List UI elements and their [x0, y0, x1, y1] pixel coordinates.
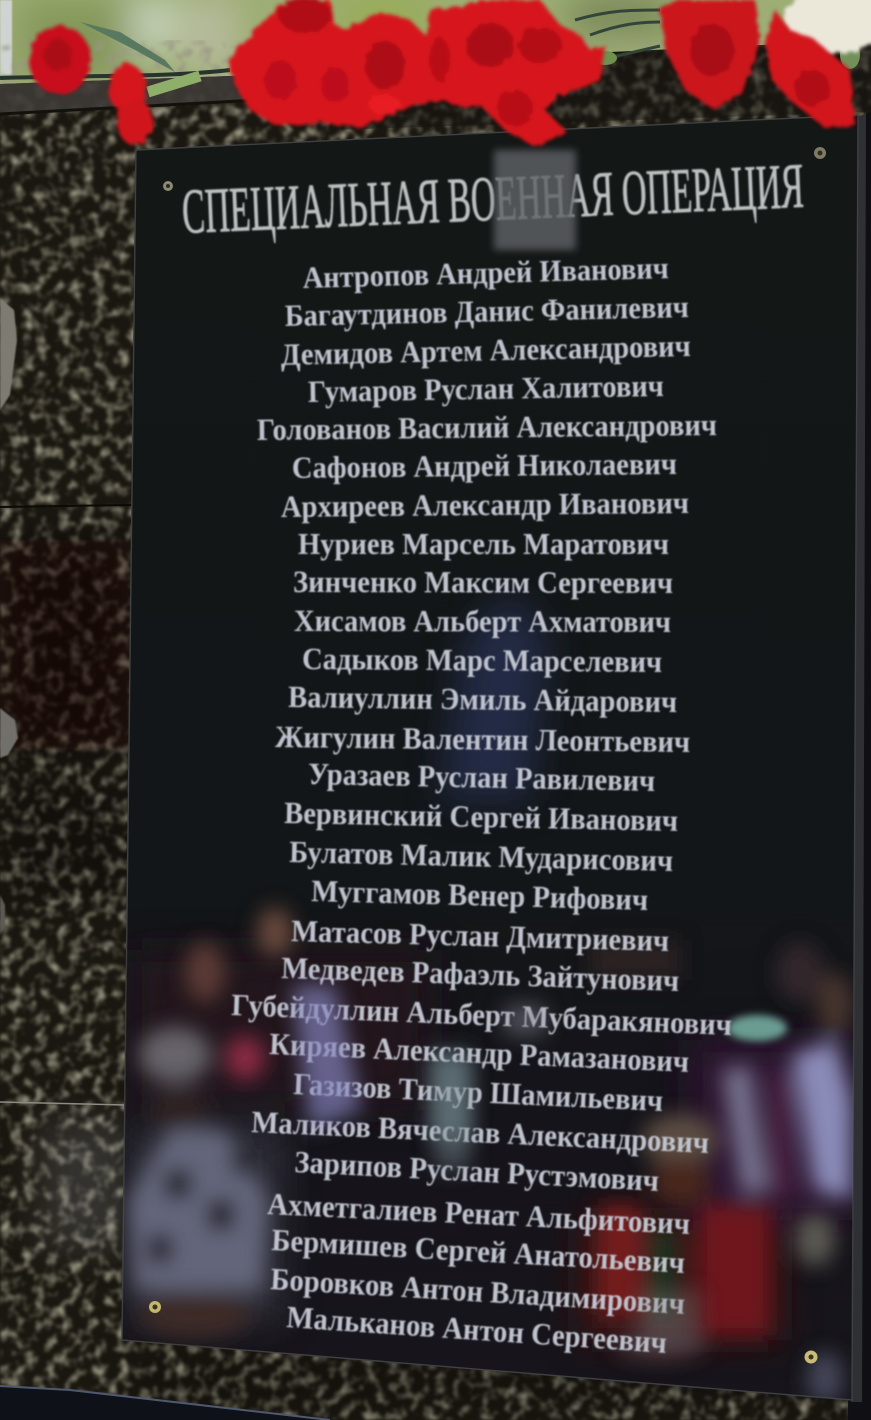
names list: Мальканов Антон Сергеевич: [286, 1299, 668, 1360]
names list: Медведев Рафаэль Зайтунович: [281, 950, 680, 998]
stone fragments at left edge: [0, 298, 18, 935]
names list: Демидов Артем Александрович: [280, 328, 691, 372]
bottom railing: [0, 1386, 330, 1420]
names list: Архиреев Александр Иванович: [281, 485, 689, 524]
background: foliage behind the memorial: [0, 0, 800, 84]
red carnations: [29, 0, 855, 147]
names list: Губейдуллин Альберт Мубаракянович: [231, 987, 733, 1042]
reflections in the polished stone: [128, 590, 853, 1404]
names list: [231, 250, 733, 1360]
names list: Гумаров Руслан Халитович: [308, 368, 664, 409]
names list: Голованов Василий Александрович: [257, 407, 717, 447]
names list: Сафонов Андрей Николаевич: [292, 446, 677, 485]
stems and leaves: [0, 10, 860, 103]
carnation hanging left: [108, 64, 153, 145]
carnation far left: [29, 26, 91, 94]
names list: Киряев Александр Рамазанович: [269, 1026, 690, 1079]
names list: Уразаев Руслан Равилевич: [308, 756, 655, 798]
names list: Муггамов Венер Рифович: [311, 873, 649, 917]
names list: Ахметгалиев Ренат Альфитович: [267, 1186, 691, 1241]
names list: Садыков Марс Марселевич: [302, 641, 662, 679]
lighter stone ledge: [0, 70, 330, 114]
screws: [149, 147, 826, 1364]
people on right: [776, 942, 824, 1002]
names list: Матасов Руслан Дмитриевич: [291, 913, 670, 958]
names list: Боровков Антон Владимирович: [270, 1261, 686, 1321]
carnation bouquet centre: [228, 0, 605, 147]
names list: Хисамов Альберт Ахматович: [294, 603, 671, 639]
names list: Зинченко Максим Сергеевич: [293, 564, 673, 600]
names list: Нуриев Марсель Маратович: [298, 526, 669, 561]
carnation far right: [765, 10, 855, 128]
names list: Валиуллин Эмиль Айдарович: [288, 679, 677, 719]
names list: Жигулин Валентин Леонтьевич: [275, 719, 690, 759]
white flower: [784, 0, 871, 54]
names list: Газизов Тимур Шамильевич: [293, 1066, 664, 1118]
faces on left: [185, 942, 225, 1002]
names list: Антропов Андрей Иванович: [302, 250, 669, 295]
dark right mount: [848, 112, 871, 1420]
checked shirt: [128, 1130, 268, 1290]
reflected light over the lettering: [292, 150, 700, 1340]
names list: Булатов Малик Мударисович: [289, 834, 674, 878]
names list: Бермишев Сергей Анатольевич: [271, 1222, 686, 1280]
names list: Вервинский Сергей Иванович: [284, 795, 678, 838]
names list: Багаутдинов Данис Фанилевич: [284, 289, 689, 333]
names list: Зарипов Руслан Рустэмович: [294, 1144, 660, 1198]
memorial plaque: [122, 115, 858, 1404]
carnation right: [660, 0, 760, 110]
names list: Маликов Вячеслав Александрович: [251, 1104, 710, 1160]
